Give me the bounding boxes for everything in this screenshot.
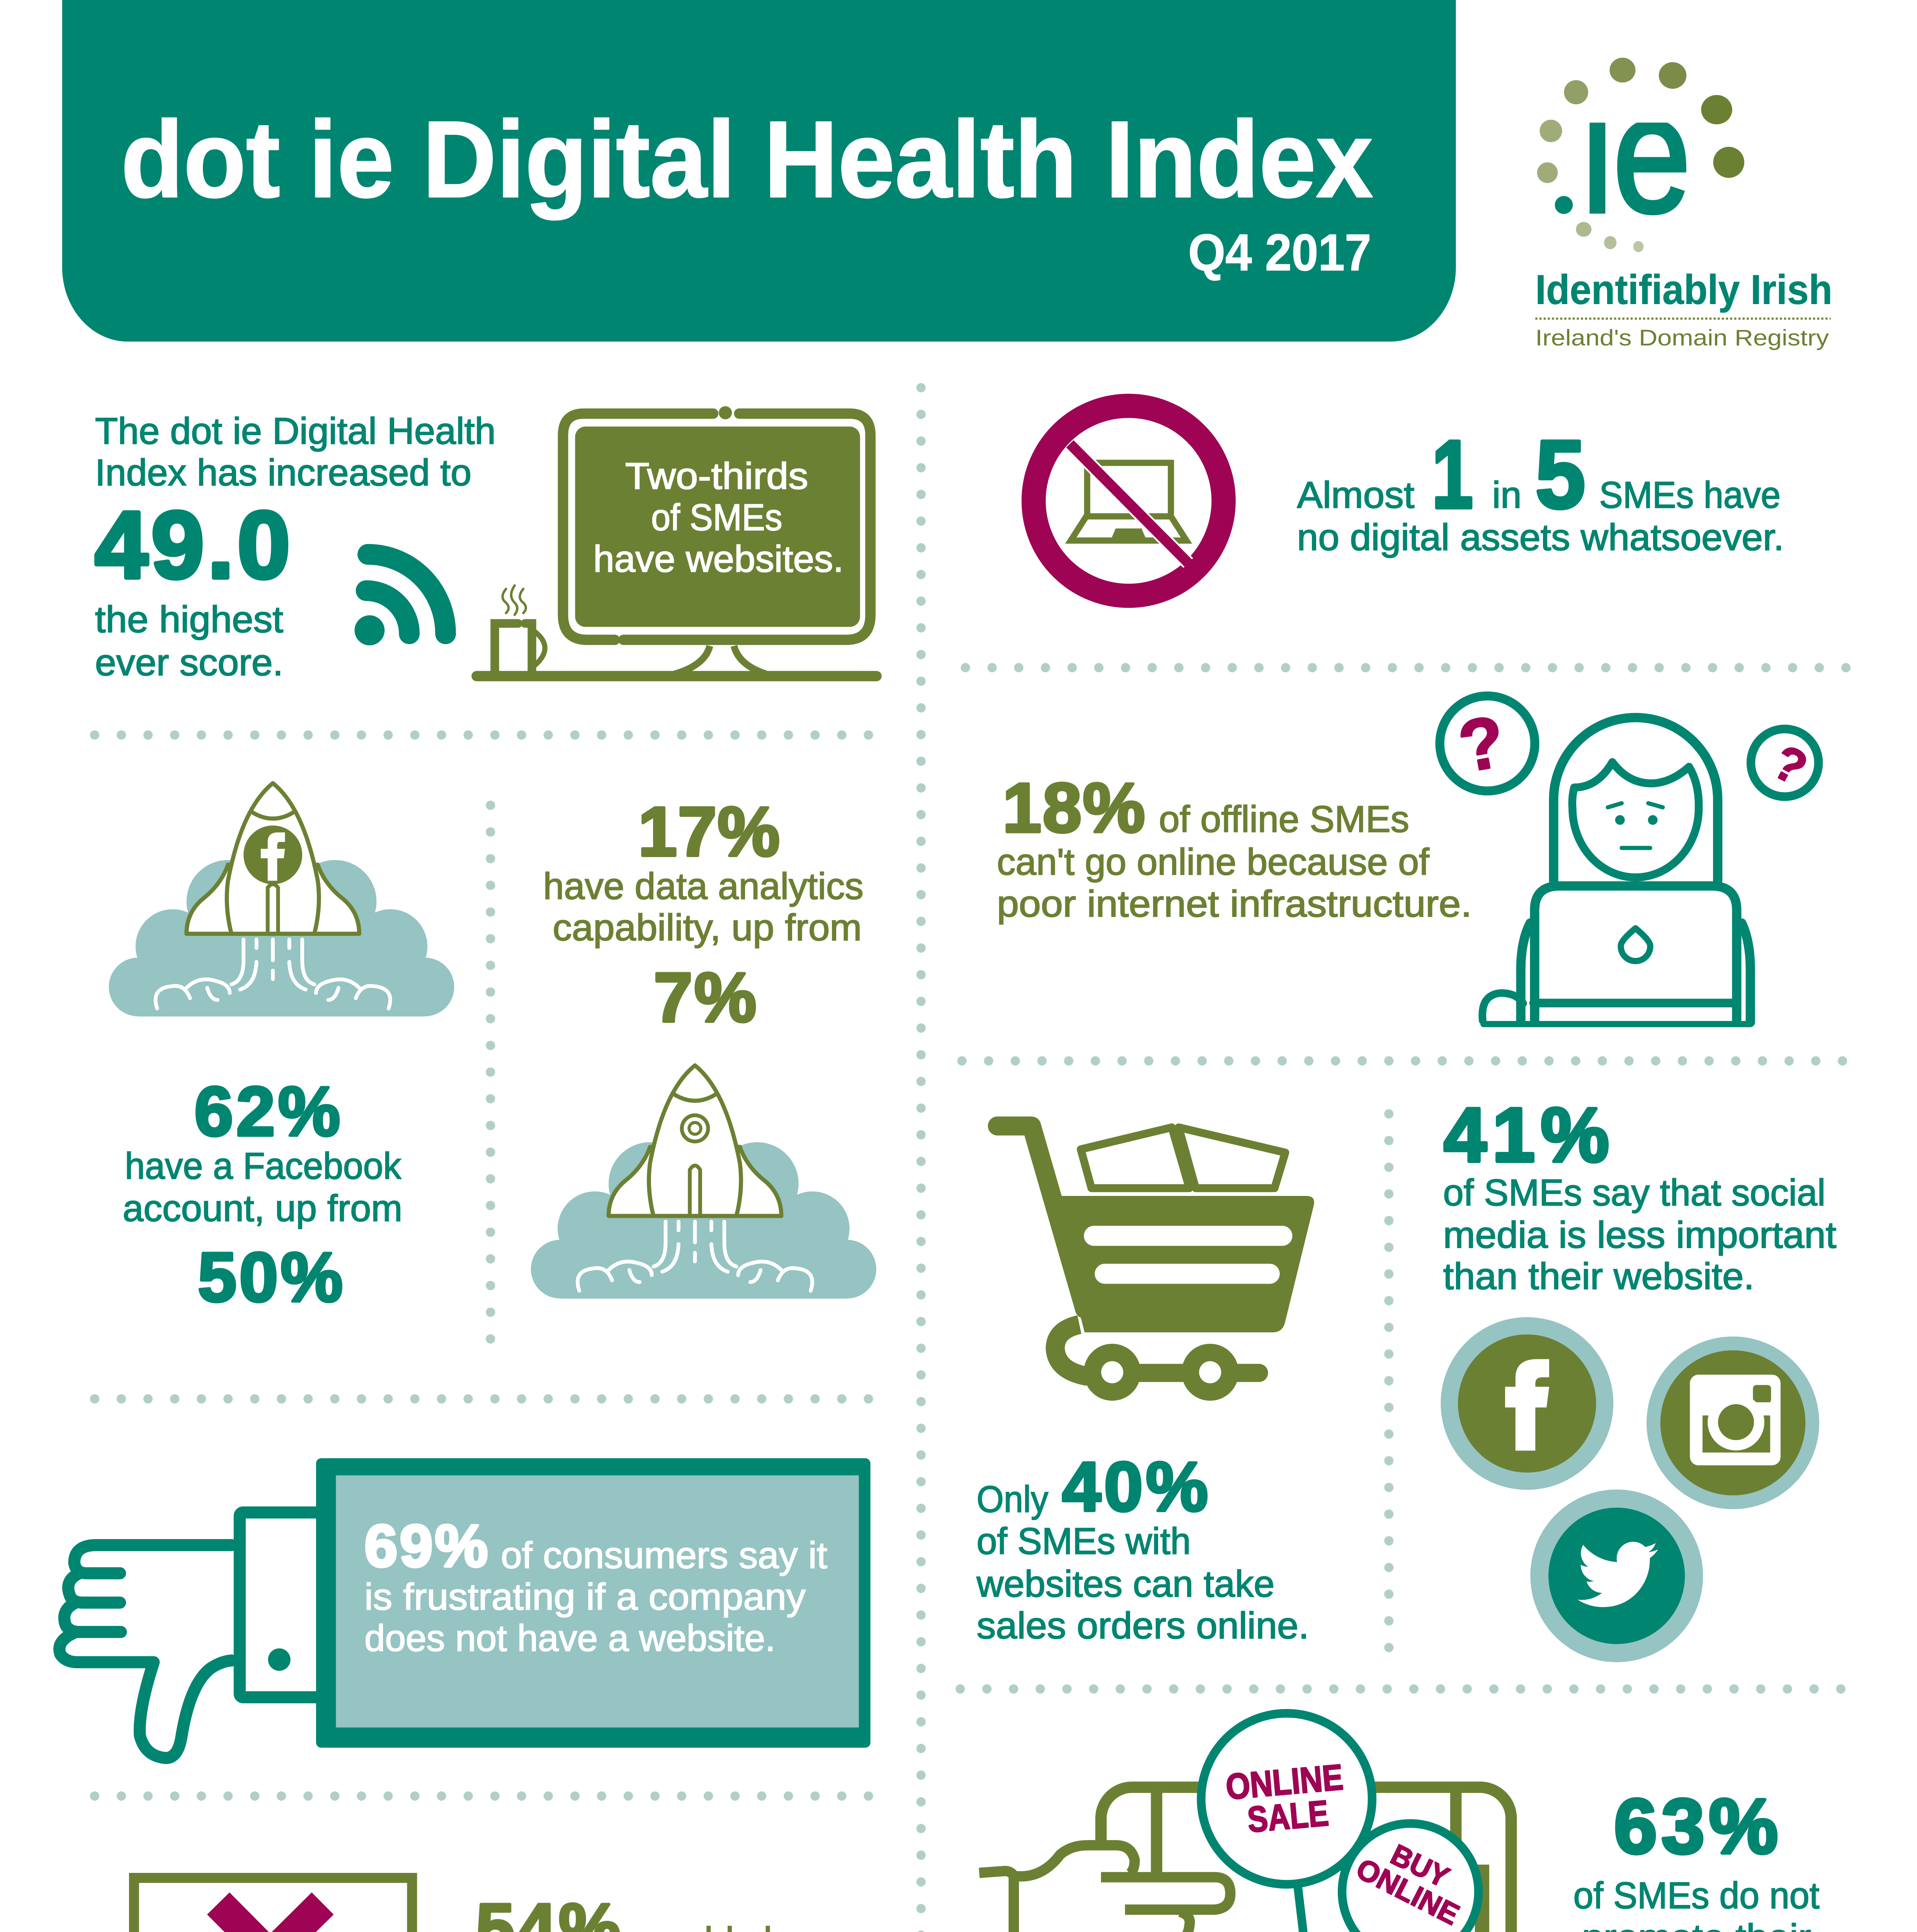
panel: 69% consumers: 69% <box>364 1512 488 1579</box>
text: 41% social media: 41% <box>1444 1092 1609 1178</box>
panel: 69% consumers <box>316 1458 871 1748</box>
text: index score: Index has increased to <box>95 452 471 493</box>
logo: ie <box>1582 60 1691 247</box>
text: index score: 49.0 <box>95 492 290 598</box>
icon: laptop with cross <box>109 1878 438 1932</box>
sign: buy online: ONLINE <box>1351 1852 1465 1932</box>
tagline: Identifiably Irish <box>1535 267 1832 313</box>
panel: 69% consumers: is frustrating if a company <box>364 1576 806 1617</box>
text: index score <box>95 411 496 684</box>
text: 62% facebook <box>122 1073 402 1316</box>
sign: online sale <box>1201 1713 1372 1932</box>
date: Q4 2017 <box>1188 224 1371 281</box>
icon: question bubble left: ? <box>1453 700 1510 787</box>
text: 17% data analytics: 7% <box>654 959 757 1037</box>
text: index score: The dot ie Digital Health <box>95 411 496 452</box>
text: index score: the highest <box>95 599 283 640</box>
sign: online sale: ONLINE <box>1224 1757 1345 1807</box>
text: two-thirds: Two-thirds <box>625 456 808 497</box>
icon: question bubble right <box>1751 729 1818 797</box>
title: dot ie Digital Health Index <box>121 99 1374 221</box>
text: almost 1 in 5 <box>1297 420 1784 558</box>
text: 41% social media: than their website. <box>1443 1256 1754 1297</box>
text: 41% social media: media is less important <box>1443 1214 1836 1256</box>
text: 40% sales orders <box>976 1448 1309 1646</box>
panel: 69% consumers: of consumers say it <box>501 1535 827 1576</box>
text: 18% offline: poor internet infrastructure. <box>997 883 1472 925</box>
icon: coffee mug <box>495 585 545 672</box>
text: 62% facebook: 50% <box>198 1238 343 1316</box>
header banner <box>62 0 1456 342</box>
text: two-thirds: of SMEs <box>651 497 782 538</box>
text: 54% competitor <box>473 1889 846 1932</box>
text: 41% social media: of SMEs say that social <box>1443 1172 1825 1214</box>
sign: buy online: BUY <box>1386 1838 1454 1894</box>
text: 40% sales orders: sales orders online. <box>976 1605 1309 1646</box>
panel: 69% consumers: does not have a website. <box>364 1618 776 1659</box>
icon: shopping cart <box>997 1126 1314 1401</box>
text: 18% offline: of offline SMEs <box>1159 799 1409 840</box>
text: almost 1 in 5: SMEs have <box>1599 474 1781 516</box>
text: almost 1 in 5: 1 <box>1432 420 1473 529</box>
icon: no laptop <box>1034 406 1224 596</box>
text: 63% promote: 63% <box>1614 1783 1778 1870</box>
icon: thumbs down hand <box>60 1512 326 1758</box>
icon: instagram badge <box>1647 1337 1819 1509</box>
text: 40% sales orders: websites can take <box>976 1563 1274 1605</box>
icon: facebook badge <box>1441 1317 1613 1490</box>
text: two-thirds <box>593 456 844 580</box>
text: index score: ever score. <box>95 642 283 684</box>
icon: wifi <box>355 554 446 645</box>
text: 62% facebook: have a Facebook <box>125 1145 401 1187</box>
text: almost 1 in 5: 5 <box>1535 420 1585 529</box>
icon: twitter badge <box>1530 1490 1703 1662</box>
text: two-thirds: have websites. <box>593 538 844 580</box>
icon: rocket with facebook logo <box>109 783 454 1017</box>
text: 18% offline <box>997 769 1472 925</box>
text: 62% facebook: account, up from <box>122 1188 402 1229</box>
sign: buy online <box>1342 1823 1478 1932</box>
text: 62% facebook: 62% <box>194 1073 340 1151</box>
text: almost 1 in 5: Almost <box>1297 474 1414 516</box>
text: almost 1 in 5: no digital assets whatsoever. <box>1297 517 1784 558</box>
icon: pointing hand <box>979 1845 1230 1932</box>
text: 17% data analytics: capability, up from <box>553 907 862 949</box>
sign: online sale: SALE <box>1246 1793 1330 1840</box>
text: 18% offline: can't go online because of <box>997 841 1429 883</box>
text: 63% promote <box>1567 1783 1829 1932</box>
text: 17% data analytics: have data analytics <box>543 866 864 907</box>
icon: rocket on cloud <box>531 1065 876 1299</box>
text: 63% promote: of SMEs do not <box>1573 1875 1819 1917</box>
text: 41% social media <box>1443 1092 1836 1297</box>
text: 17% data analytics: 17% <box>638 793 780 871</box>
text: 40% sales orders: Only <box>976 1479 1048 1520</box>
logo <box>1535 58 1832 350</box>
icon: confused woman at laptop <box>1440 696 1818 1024</box>
icon: desktop monitor <box>477 406 876 676</box>
text: 40% sales orders: of SMEs with <box>976 1521 1191 1562</box>
icon: tablet with hand <box>979 1713 1511 1932</box>
text: almost 1 in 5: in <box>1492 474 1522 516</box>
text: 17% data analytics <box>543 793 864 1037</box>
text: 18% offline: 18% <box>1002 769 1145 847</box>
registry line: Ireland's Domain Registry <box>1535 325 1829 350</box>
text: 40% sales orders: 40% <box>1062 1448 1208 1526</box>
icon: question bubble right: ? <box>1764 734 1816 796</box>
icon: question bubble left <box>1440 696 1535 791</box>
